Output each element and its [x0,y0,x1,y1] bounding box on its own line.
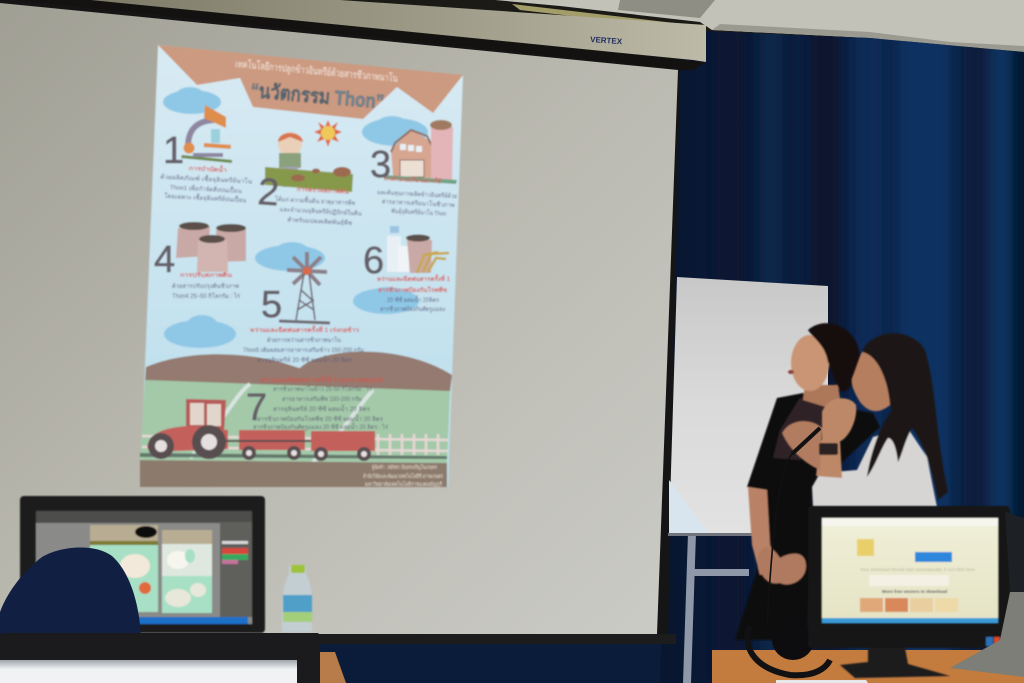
screen bottom rail [0,634,676,644]
projection screen [0,0,680,640]
icon: wagons [225,430,375,461]
step numbers: 3 [370,144,391,186]
long hair [862,333,948,500]
step 7 text [253,374,389,431]
download button [915,552,952,562]
bezel [808,506,1010,648]
screen [822,518,998,623]
step 1 text [159,161,253,204]
blue taskbar [36,617,248,624]
banner strip [869,575,949,586]
step numbers [154,130,391,429]
road curves [190,384,373,462]
step numbers: 6 [363,240,384,282]
icon: soil sacks [176,222,246,272]
banner title: เทคโนโลยีการปลูกข้าวอินทรีย์ด้วยสารชีวภาพนาโน [235,57,398,85]
step 2 text: การตรวจสภาพดิน [297,185,350,196]
vector thumbnails [860,598,958,612]
step 5 text: Thon5 เติมผสมสารอาหารเสริมข้าว 150-200 กรัม [243,347,364,354]
arm [748,487,780,575]
icon: barn and silo [384,120,457,184]
hand near mouth [822,398,856,442]
step 5 text [243,324,364,364]
water bottle [282,565,312,632]
dress collar [773,398,838,460]
headphones [747,620,830,675]
step 7 text: สารอาหารเสริมพืช 150-200 กรัม [282,395,362,403]
step numbers: 7 [246,387,267,429]
curtain [650,0,1024,683]
artboard left [90,525,158,612]
step 6 text: สารชีวภาพป้องกันศัตรูแมลง [380,305,445,313]
papers [776,680,868,683]
bezel [20,496,265,633]
footer credit: มหาวิทยาลัยเทคโนโลยีราชมงคลธัญบุรี [365,480,442,488]
screen [36,511,252,624]
audience head with dark hood [0,547,141,640]
download message: Your download should start automatically, if not Click here. [860,567,976,572]
step 2 text: ได้แก่ ความชื้นดิน ธาตุอาหารพืช [274,193,355,207]
face [791,335,829,391]
step 7 text: สารชีวภาพป้องกันโรคพืช 20 ซีซี ผสมน้ำ 20 ลิตร [257,413,384,423]
stand [840,648,950,678]
footer credit: สำนักวิจัยและพัฒนาเทคโนโลยีชีวภาพเกษตร [363,472,443,480]
icon: microscope [181,105,232,163]
step 7 text: หว่านและฉีดพ่นสารครั้งที่ 2 ออกรวงสมบูรณ์ [260,374,383,385]
icon: farmer on soil [265,132,353,192]
icon: windmill [279,252,330,323]
projected poster [140,45,463,488]
lower hand [782,421,822,470]
step 7 text: สารชีวภาพป้องกันศัตรูแมลง 20 ซีซี ผสมน้ำ 20 ลิตร : ไร่ [253,421,389,431]
step numbers: 1 [163,130,184,172]
step 2 text: สำหรับแปลงผลิตพันธุ์พืช [287,216,352,227]
hills [145,352,452,392]
icon: bottles, sack and rice [387,226,449,273]
person: woman in white [782,333,948,507]
footer credit: ผู้จัดทำ : สมัชชา อินทรเจริญในเกษตร [372,464,437,471]
hair [808,323,860,392]
footer band [140,460,447,487]
desk [712,650,1024,683]
white cardigan [812,427,937,507]
step 5 text: สารจุลินทรีย์ 20 ซีซี ผสมน้ำ 20 ลิตร [257,354,353,364]
field [140,380,450,463]
step 1 text: การบำบัดน้ำ [189,162,227,174]
badge icons [986,637,1000,646]
chair right [1005,512,1024,600]
step 3 text: สารอาหารเสริมนาโนชีวภาพ [382,197,455,209]
step 2 text [273,184,363,227]
monitor: left with illustrator [20,496,265,633]
black dress [735,393,880,640]
bright screen [0,660,297,683]
step 3 text: การคำนวณปริมาณการใช้ [384,174,441,185]
step 5 text: หว่านและฉีดพ่นสารครั้งที่ 1 เร่งกอข้าว [250,324,360,334]
banner heading: “นวัตกรรม Thon” [250,80,385,114]
ceiling [0,0,1024,60]
step 5 text: ด้วยการหว่านสารชีวภาพนาโน [267,336,341,344]
step 1 text: Thon1 เพื่อกำจัดสิ่งปนเปื้อน [170,181,242,195]
step 7 text: สารจุลินทรีย์ 20 ซีซี ผสมน้ำ 20 ลิตร [273,403,371,413]
right tool panel [220,522,252,617]
banner [158,45,463,119]
step 6 text: 20 ซีซี ผสมน้ำ 20ลิตร [387,294,440,304]
watch [819,443,838,455]
projector screen housing VERTEX [13,0,706,70]
clouds [163,87,428,348]
step 4 text: Thon4 25–50 กิโลกรัม : ไร่ [172,292,241,300]
step 1 text: ด้วยผลิตภัณฑ์ เชื้อจุลินทรีย์นาโน [160,171,253,185]
clasped hands [757,547,806,584]
banner title: More free vectors to download [882,589,948,594]
step numbers: 4 [154,239,175,281]
step 6 text [377,273,451,313]
bag right [950,592,1024,677]
step 6 text: หว่านและฉีดพ่นสารครั้งที่ 1 [377,273,451,283]
icon: tractor [147,399,228,459]
step 1 text: โดยเฉพาะ เชื้อจุลินทรีย์ปนเปื้อน [164,190,247,204]
projector screen housing VERTEX: VERTEX [590,35,623,46]
whiteboard [668,277,828,536]
step 3 text: และต้นทุนการผลิตข้าวอินทรีย์ด้วย [377,188,457,200]
step numbers: 2 [256,171,280,214]
menu bar [36,511,252,523]
easel [683,533,749,683]
orange graphic [139,582,151,594]
download thumbnail [857,539,874,556]
step 6 text: สารชีวภาพป้องกันโรคพืช [378,286,447,294]
fence [142,434,448,455]
microphone and cord [767,428,820,625]
step 4 text: การปรับสภาพดิน [180,271,233,279]
face [852,352,890,411]
forearm [816,440,842,478]
step 4 text: ด้วยสารปรับปรุงดินชีวภาพ [172,282,239,290]
colour swatches [222,541,248,564]
step 3 text: พันธุ์จุลินทรีย์นาโน Thon [391,207,446,218]
poster background [140,45,463,487]
step 7 text: สารชีวภาพนาโนข้าว 25-50 กิโลกรัม : ไร่ [273,385,373,393]
monitor: right with web page [808,506,1010,678]
desk left [320,652,346,683]
step 4 text [172,271,241,300]
footer credit [363,464,443,488]
step numbers: 5 [261,284,282,326]
artboard right [162,530,212,613]
lips [788,370,794,374]
neck [803,385,842,412]
person: woman in black [735,323,880,640]
icon: sun [314,120,342,147]
step 3 text [376,174,458,218]
step 2 text: และจำนวนจุลินทรีย์ปฏิปักษ์ในดิน [280,205,362,217]
ground strip [140,453,447,459]
monitor: front bezel [0,633,320,683]
